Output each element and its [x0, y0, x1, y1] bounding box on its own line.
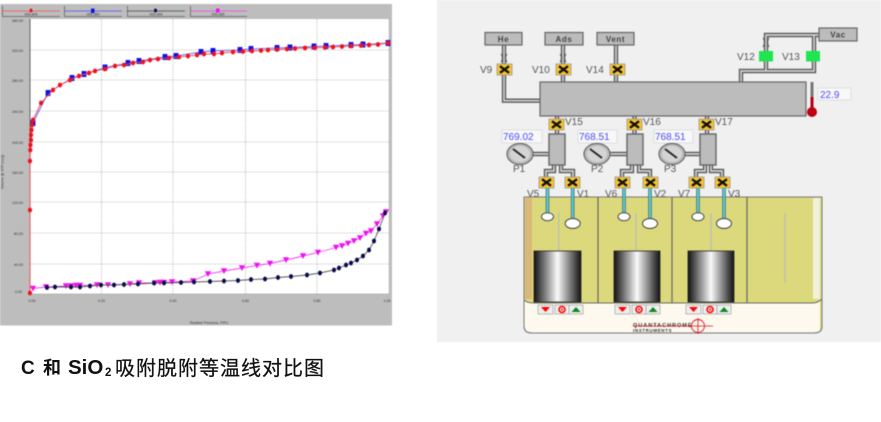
series: C desorption (blue): [33, 43, 388, 123]
y axis labels: 240.00: [12, 110, 23, 114]
pressure gauges: P3: [664, 164, 677, 175]
series: C adsorption (red): [30, 43, 388, 293]
chart legend: 005,389: [86, 12, 100, 16]
caption: SiO: [68, 356, 103, 379]
y axis labels: 280.00: [12, 79, 23, 83]
valves top row: V9: [480, 65, 493, 76]
logo: [633, 318, 713, 334]
pressure readouts: 769.02: [503, 132, 534, 143]
logo: INSTRUMENTS: [633, 328, 672, 333]
gas pipes: [504, 35, 819, 178]
valves top row: [480, 64, 625, 76]
gas port Vent: Vent: [606, 35, 625, 44]
green valves: [737, 51, 820, 63]
gas port Ads: [545, 32, 583, 45]
y axis labels: 40.00: [14, 263, 23, 267]
valves above cabinet: V5: [527, 189, 540, 200]
valves under manifold: V17: [715, 117, 733, 128]
gas port He: He: [498, 35, 509, 44]
x axis labels: 0.00: [28, 299, 36, 303]
plot area: [30, 19, 389, 294]
pressure readouts: 768.51: [655, 132, 686, 143]
x axis labels: 0.20: [98, 299, 105, 303]
sample cabinet: [524, 197, 822, 333]
lift control buttons: [538, 305, 731, 314]
valves above cabinet: V3: [728, 189, 741, 200]
caption: 和: [43, 358, 61, 378]
chart legend: 005,389: [212, 12, 224, 16]
y axis labels: 320.00: [12, 49, 23, 53]
panel: instrument schematic: [437, 0, 881, 342]
flow restrictors: [501, 38, 769, 62]
sample tubes: [542, 187, 732, 228]
thermometer: [807, 82, 817, 117]
x axis labels: 0.60: [242, 299, 249, 303]
gas port Ads: Ads: [556, 35, 572, 44]
y axis labels: 120.00: [12, 201, 23, 205]
chart legend: 005,469: [24, 12, 38, 16]
y axis labels: Volume @ STP (cc/g): [0, 155, 4, 189]
valves top row: V10: [532, 65, 550, 76]
chart legend: [2, 6, 247, 17]
series: SiO2 desorption (magenta): [33, 212, 386, 288]
valves under manifold: V15: [565, 117, 583, 128]
caption: 吸附脱附等温线对比图: [115, 352, 325, 381]
x axis labels: 0.40: [170, 299, 176, 303]
valves under manifold: V16: [643, 117, 661, 128]
logo: QUANTACHROME: [633, 323, 693, 329]
series: SiO2 adsorption (navy): [47, 213, 385, 288]
gas port Vent: [597, 32, 634, 45]
y axis labels: 80.00: [14, 232, 23, 236]
dewar cylinders: [534, 251, 734, 302]
pressure readouts: [502, 130, 693, 143]
green valves: V13: [782, 52, 800, 63]
vacuum port: [819, 28, 857, 41]
y axis labels: [0, 19, 23, 294]
valves above cabinet: V6: [605, 189, 618, 200]
y axis labels: 200.00: [12, 141, 23, 145]
manifold chamber: [540, 82, 806, 116]
x axis labels: 1.00: [384, 299, 390, 303]
valves under manifold: [549, 117, 733, 130]
caption: [21, 352, 325, 381]
temperature readout: 22.9: [820, 90, 840, 101]
pressure gauges: [507, 144, 685, 175]
x axis labels: 0.80: [314, 299, 320, 303]
manifold tanks: [549, 134, 716, 165]
vacuum port: Vac: [830, 30, 846, 40]
pressure gauges: P1: [513, 164, 526, 175]
x axis labels: [28, 299, 390, 325]
gas port He: [485, 32, 522, 45]
y axis labels: 160.00: [12, 171, 23, 175]
valves above cabinet: V2: [654, 189, 667, 200]
x axis labels: Relative Pressure, P/Po: [190, 321, 228, 325]
valves above cabinet: V1: [577, 189, 590, 200]
valves above cabinet: [527, 177, 741, 200]
temperature readout: [818, 88, 851, 101]
green valves: V12: [737, 52, 755, 63]
y axis labels: 0.00: [15, 290, 22, 294]
pressure readouts: 768.51: [579, 132, 610, 143]
caption: 2: [105, 367, 111, 379]
panel: isotherm chart: [0, 4, 392, 326]
chart legend: 005,469: [150, 12, 162, 16]
pressure gauges: P2: [591, 164, 604, 175]
caption: C: [21, 358, 35, 379]
y axis labels: 360.00: [12, 19, 23, 23]
valves above cabinet: V7: [678, 189, 691, 200]
valves top row: V14: [586, 65, 604, 76]
